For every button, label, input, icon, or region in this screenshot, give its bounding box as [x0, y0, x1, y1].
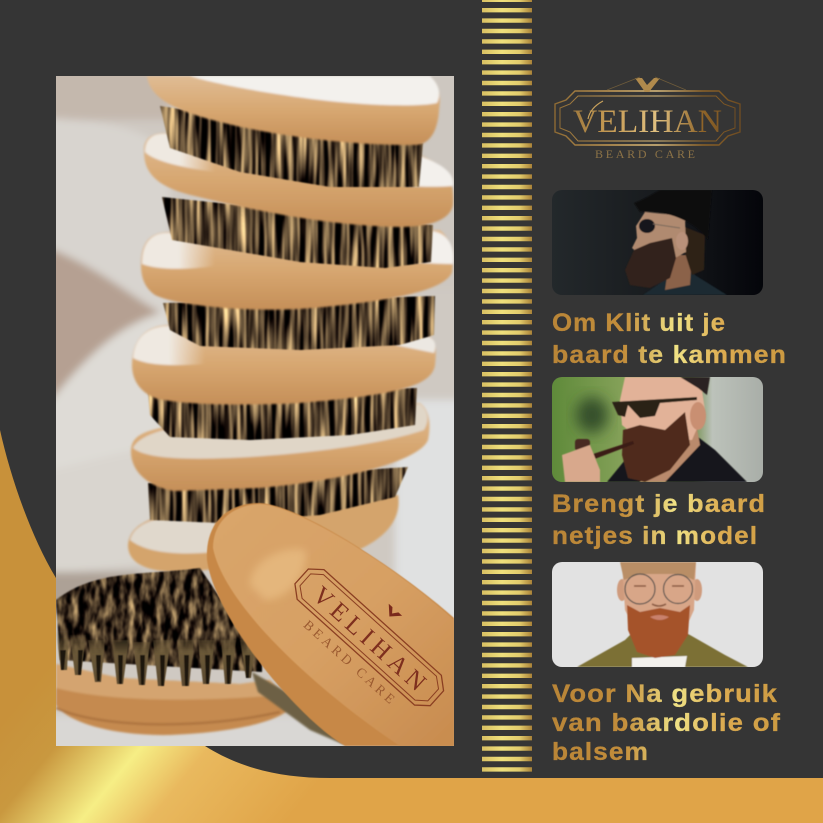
caption: comb out tangles: Om Klit uit je [552, 309, 726, 337]
panel: brush stack photo [56, 76, 454, 746]
photo: man with pipe [552, 377, 763, 482]
t-shirt [632, 656, 687, 667]
hair [684, 227, 706, 275]
ear [690, 402, 706, 430]
brush 4 bristles [148, 388, 417, 440]
eyes and nose [634, 586, 684, 606]
logo on brush: VELIHAN [307, 582, 431, 697]
tilted brush bristle edge [252, 672, 345, 745]
brush 1 bristles [160, 106, 423, 187]
face [632, 212, 686, 262]
gold comb stripes [482, 0, 532, 775]
logo: Velihan Beard Care [555, 77, 740, 161]
brush 3 bristles [163, 296, 435, 350]
brush 1 [147, 76, 440, 145]
brush 5 bristles [148, 467, 408, 523]
neck [640, 428, 700, 482]
face [620, 377, 705, 440]
caption: shapes the beard: Brengt je baard [552, 490, 766, 518]
hand [562, 445, 600, 482]
photo: man with glasses [552, 562, 763, 667]
front brush bristle mass [56, 568, 262, 672]
sunglasses [612, 397, 697, 418]
logo: Velihan Beard Care: BEARD CARE [595, 147, 695, 161]
pipe [593, 441, 634, 459]
brush 3 [141, 230, 453, 310]
brush 2 [144, 133, 453, 227]
beard [622, 412, 690, 482]
brush 5 [131, 403, 429, 491]
glasses [625, 574, 655, 604]
gold curved corner and bottom band [0, 430, 823, 823]
top hat [634, 190, 712, 240]
caption: before and after oil or balm: van baardolie of [552, 709, 781, 737]
brush 2 bristles [162, 197, 433, 268]
photo: man with top hat [552, 190, 763, 295]
front brush tufts [56, 630, 256, 686]
logo on brush [294, 568, 444, 706]
brush 6 [128, 495, 399, 572]
jacket [577, 630, 748, 667]
logo on brush: BEARD CARE [301, 617, 398, 706]
jacket [643, 272, 727, 295]
logo: Velihan Beard Care: VELIHAN [573, 104, 722, 140]
hair [680, 377, 710, 395]
beard [627, 605, 690, 658]
caption: before and after oil or balm: balsem [552, 738, 649, 766]
tilted brush [207, 503, 462, 746]
shirt [607, 437, 747, 482]
hair [620, 562, 696, 580]
caption: shapes the beard: netjes in model [552, 522, 758, 550]
ear [676, 232, 688, 250]
face [622, 562, 696, 630]
glasses [639, 219, 655, 233]
brush 4 [132, 325, 436, 405]
beard [625, 238, 676, 288]
front brush wood [56, 664, 292, 735]
ears [617, 579, 627, 601]
neck [665, 255, 692, 290]
caption: comb out tangles: baard te kammen [552, 341, 787, 369]
fabric backdrop [56, 76, 454, 746]
caption: before and after oil or balm: Voor Na gebruik [552, 680, 778, 708]
